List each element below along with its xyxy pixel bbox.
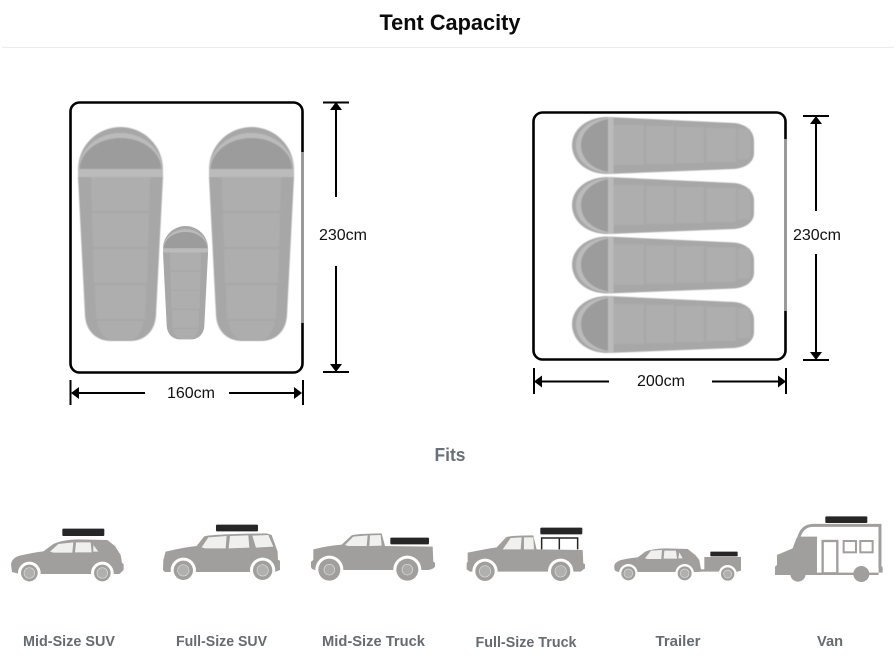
dimension: 160cm width: 160cm <box>167 385 215 402</box>
icon: full-size SUV with roof tent <box>163 525 280 583</box>
sleeping bag 3 <box>572 236 754 294</box>
icon: mid-size truck with bed tent <box>311 533 435 584</box>
dimension: 230cm height: 230cm <box>793 227 841 244</box>
icon: full-size truck with rack tent <box>467 528 585 584</box>
label: Full-Size SUV: Full-Size SUV <box>176 634 267 650</box>
child sleeping bag <box>163 226 208 339</box>
label: Van: Van <box>817 634 843 650</box>
tent floor outline <box>70 102 304 372</box>
dimension: 160cm width <box>70 380 303 405</box>
dimension: 200cm width <box>534 368 786 394</box>
icon: car with trailer tent <box>614 548 741 583</box>
heading: Fits: Fits <box>434 445 466 465</box>
panel: left tent diagram 160cm by 230cm <box>70 102 367 405</box>
icon: camper van with roof tent <box>775 516 883 582</box>
dimension: 200cm width: 200cm <box>637 373 685 390</box>
label: Full-Size Truck: Full-Size Truck <box>476 635 577 651</box>
sleeping bag 2 <box>572 177 754 234</box>
dimension: 230cm height <box>793 116 841 360</box>
sleeping bag 1 <box>572 117 754 174</box>
tent floor outline <box>534 112 787 360</box>
dimension: 230cm height: 230cm <box>319 227 367 244</box>
right adult sleeping bag <box>209 127 294 341</box>
label: Mid-Size SUV: Mid-Size SUV <box>23 634 115 650</box>
panel: right tent diagram 200cm by 230cm <box>534 112 841 394</box>
sleeping bag 4 <box>572 296 754 353</box>
label: Trailer: Trailer <box>656 634 701 650</box>
icon: mid-size SUV with roof tent <box>11 529 124 584</box>
dimension: 230cm height <box>319 102 367 372</box>
label: Mid-Size Truck: Mid-Size Truck <box>322 634 426 650</box>
left adult sleeping bag <box>78 127 163 341</box>
title: Tent Capacity <box>380 10 521 35</box>
